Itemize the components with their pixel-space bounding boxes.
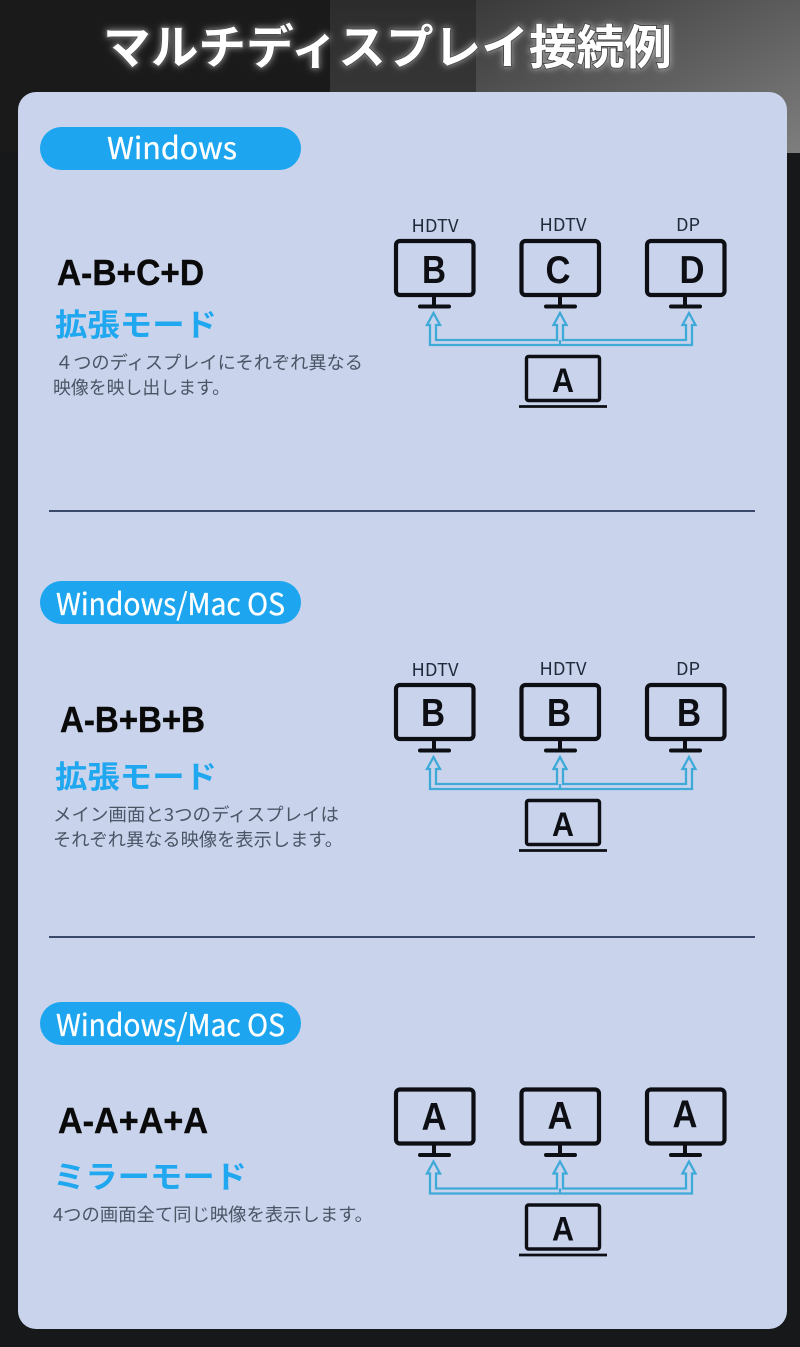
port labels: HDTV — [412, 656, 459, 682]
monitor B: B — [422, 249, 446, 292]
connection diagram — [396, 655, 724, 850]
mode heading: ミラーモード — [53, 1152, 247, 1197]
port labels: HDTV — [412, 212, 459, 238]
description: 映像を映し出します。 — [53, 374, 230, 400]
combination heading: A-A+A+A — [58, 1100, 208, 1141]
monitor B — [396, 685, 474, 750]
connection diagram — [396, 211, 724, 406]
laptop A: A — [552, 362, 574, 400]
monitor B: B — [547, 692, 571, 735]
combination heading: A-B+C+D — [57, 252, 204, 293]
monitor A: A — [422, 1096, 446, 1139]
title: マルチディスプレイ接続例 — [103, 9, 672, 78]
label pill: Windows — [40, 124, 301, 170]
description: ４つのディスプレイにそれぞれ異なる — [55, 349, 363, 375]
port labels: HDTV — [540, 655, 587, 681]
section 3: Windows/Mac OS mirror mode — [40, 1001, 724, 1255]
description: 4つの画面全て同じ映像を表示します。 — [53, 1201, 373, 1227]
arrows — [427, 313, 696, 345]
label pill: Windows: Windows — [107, 124, 237, 168]
monitor B — [647, 685, 724, 750]
section 1: Windows extended mode — [40, 124, 724, 406]
laptop A: A — [552, 806, 574, 844]
monitor B — [522, 685, 599, 750]
section 2: Windows/Mac OS extended mode — [40, 580, 724, 852]
monitor A: A — [672, 1094, 698, 1136]
mode heading: 拡張モード — [55, 300, 217, 345]
port labels — [412, 655, 700, 682]
monitor B: B — [677, 692, 701, 735]
description: メイン画面と3つのディスプレイは — [53, 801, 339, 827]
connection diagram — [396, 1090, 724, 1255]
monitor B — [396, 241, 474, 306]
label pill: Windows/Mac OS: Windows/Mac OS — [56, 1001, 285, 1045]
monitor A — [522, 1090, 599, 1155]
laptop A: A — [552, 1210, 574, 1248]
monitor B: B — [421, 692, 445, 735]
divider — [49, 510, 755, 512]
monitor A: A — [548, 1095, 572, 1138]
arrows — [427, 1162, 696, 1194]
port labels: HDTV — [540, 211, 587, 237]
laptop A — [519, 1205, 607, 1255]
combination heading: A-B+B+B — [60, 699, 205, 740]
port labels: DP — [676, 655, 700, 681]
port labels: DP — [676, 211, 700, 237]
monitor D: D — [680, 249, 704, 292]
label pill: Windows/Mac OS: Windows/Mac OS — [56, 580, 285, 624]
arrows — [427, 757, 696, 789]
laptop A — [519, 356, 607, 406]
monitor C: C — [546, 249, 570, 292]
port labels — [412, 211, 700, 238]
monitor C — [522, 241, 599, 306]
monitor A — [396, 1090, 474, 1155]
monitor D — [647, 241, 724, 306]
laptop A — [519, 800, 607, 850]
monitor A — [647, 1090, 724, 1155]
divider — [49, 936, 755, 938]
description: それぞれ異なる映像を表示します。 — [53, 826, 343, 852]
mode heading: 拡張モード — [55, 752, 217, 797]
